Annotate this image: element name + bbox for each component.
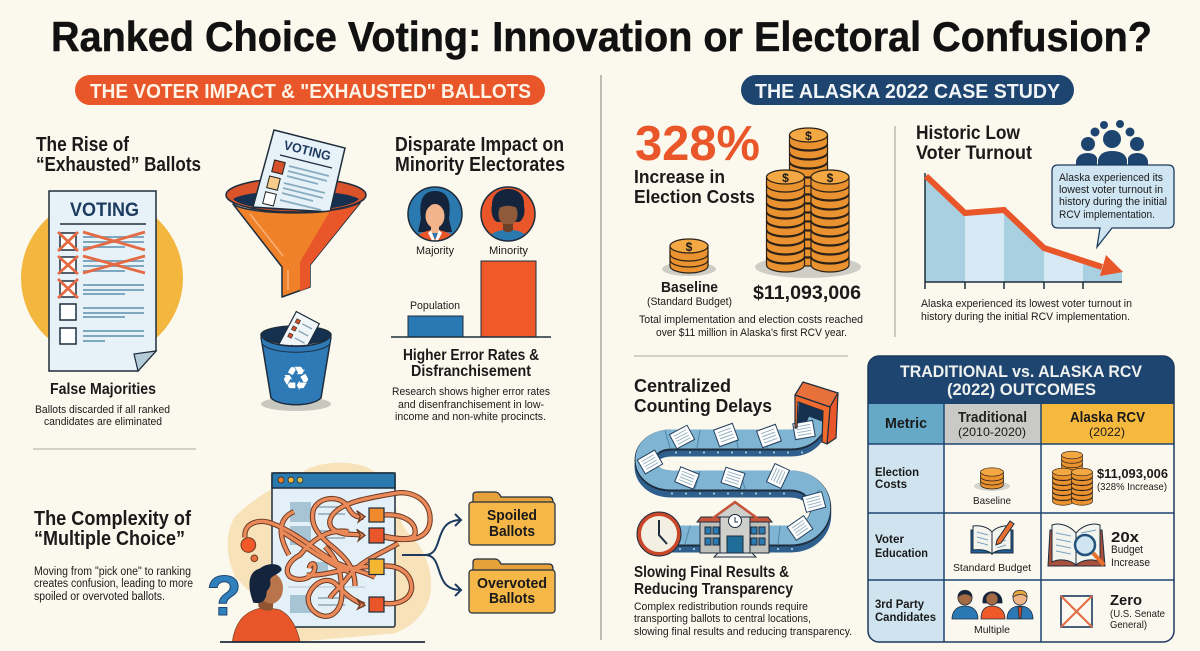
row: third party candidates: 3rd Party — [875, 597, 924, 611]
heading: centralized counting delays — [634, 376, 772, 416]
callout: lowest turnout: RCV implementation. — [1059, 209, 1155, 221]
comparison table — [868, 356, 1174, 642]
arrow: leads to spoiled and overvoted — [402, 514, 461, 596]
row: voter education: Standard Budget — [953, 562, 1031, 574]
icon: baseline coin stack: $ — [686, 240, 693, 254]
text: slowing final results — [634, 564, 852, 638]
icon: crossed-out ballot — [21, 191, 183, 371]
heading: increase in election costs: Increase in — [634, 167, 725, 187]
icon: crossed box — [1061, 596, 1092, 627]
label: baseline: (Standard Budget) — [647, 296, 732, 308]
text: false majorities: Ballots discarded if all ranked — [35, 404, 170, 416]
heading: disparate impact: Minority Electorates — [395, 154, 565, 176]
heading: centralized counting delays: Counting Delays — [634, 396, 772, 416]
column headers: (2022) — [1089, 425, 1125, 439]
icon: candidates — [952, 590, 1033, 619]
text: cost description: Total implementation and election costs reached — [639, 314, 863, 326]
icon: recycling bin: ♻ — [281, 359, 311, 398]
line chart: turnout decline — [925, 173, 1123, 289]
rank boxes — [369, 508, 384, 612]
row: election costs — [875, 451, 1168, 507]
folder: overvoted ballots: Overvoted — [477, 575, 547, 592]
label: minority: Minority — [489, 245, 528, 257]
row: voter education: Education — [875, 546, 928, 560]
text: false majorities — [35, 381, 170, 428]
text: higher error rates: income and non-white procincts. — [395, 411, 546, 423]
text: higher error rates: Disfranchisement — [411, 363, 531, 380]
column headers: (2010-2020) — [958, 425, 1026, 439]
icon: tall coin stacks: $ — [805, 129, 812, 143]
text: complexity of multiple choice: creates confusion, leading to more — [34, 578, 193, 590]
text: slowing final results: transporting ballots to central locations, — [634, 613, 811, 625]
panel: centralized counting — [634, 376, 852, 638]
label: majority: Majority — [416, 245, 454, 257]
text: complexity of multiple choice: spoiled or overvoted ballots. — [34, 591, 165, 603]
ballots on belt — [637, 420, 826, 540]
text: slowing final results: Complex redistribution rounds require — [634, 601, 808, 613]
table title: TRADITIONAL vs. ALASKA RCV — [900, 362, 1143, 381]
column headers — [885, 409, 1145, 439]
row: voter education: 20x — [1111, 529, 1140, 546]
text: cost description — [639, 314, 863, 339]
text: false majorities: candidates are eliminated — [44, 416, 162, 428]
icon: small coins — [974, 468, 1010, 491]
row: third party candidates: Multiple — [974, 624, 1010, 636]
text: complexity of multiple choice: Moving from "pick one" to ranking — [34, 566, 191, 578]
icon: book and magnifier — [1048, 524, 1105, 566]
row: voter education: Voter — [875, 532, 904, 546]
row: third party candidates: Zero — [1110, 592, 1142, 609]
row: voter education — [875, 521, 1150, 574]
bar chart: population vs minority errors — [391, 261, 551, 337]
folder: spoiled ballots — [469, 492, 555, 545]
text: higher error rates — [392, 347, 550, 423]
stat: 328 percent: 328% — [635, 117, 760, 171]
row: election costs: Baseline — [973, 495, 1011, 507]
row: election costs: Costs — [875, 477, 907, 491]
callout: lowest turnout — [1052, 165, 1174, 247]
heading: centralized counting delays: Centralized — [634, 376, 731, 396]
gate — [795, 382, 838, 444]
icon: recycling bin — [261, 312, 331, 411]
heading: rise of exhausted ballots: The Rise of — [36, 134, 129, 156]
row: third party candidates — [875, 590, 1165, 636]
row: voter education: Increase — [1111, 557, 1150, 569]
text: slowing final results: Reducing Transparency — [634, 581, 793, 598]
label: baseline — [647, 279, 732, 308]
row: third party candidates: General) — [1110, 619, 1147, 631]
icon: ballot in funnel — [226, 130, 366, 297]
text: slowing final results: Slowing Final Results & — [634, 564, 789, 581]
panel: exhausted ballots — [21, 134, 201, 428]
icon: tall coin stacks: $ — [782, 171, 789, 185]
heading: rise of exhausted ballots: “Exhausted” Ballots — [36, 154, 201, 176]
icon: baseline coin stack — [662, 239, 716, 276]
icon: tall coins — [1053, 451, 1092, 505]
text: slowing final results: slowing final results and reducing transparency. — [634, 626, 852, 638]
row: election costs: (328% Increase) — [1097, 481, 1167, 493]
section heading: alaska case study: THE ALASKA 2022 CASE STUDY — [755, 80, 1060, 103]
callout: lowest turnout: lowest voter turnout in — [1059, 184, 1163, 196]
icon: confused person — [207, 564, 300, 642]
bar chart: population vs minority errors: Population — [410, 300, 460, 312]
column headers: Metric — [885, 415, 927, 432]
icon: tall coin stacks: $ — [827, 171, 834, 185]
column headers: Alaska RCV — [1070, 409, 1145, 426]
icon: crowd — [1076, 120, 1148, 166]
heading: increase in election costs: Election Costs — [634, 187, 755, 207]
row: election costs: $11,093,006 — [1097, 467, 1168, 481]
row: third party candidates: (U.S. Senate — [1110, 608, 1165, 620]
heading: disparate impact: Disparate Impact on — [395, 134, 564, 156]
text: complexity of multiple choice: “Multiple Choice” — [34, 528, 185, 550]
table title — [900, 362, 1143, 399]
tangled arrows — [241, 493, 430, 616]
text: higher error rates: Higher Error Rates & — [403, 347, 539, 364]
icon: clock — [637, 512, 681, 556]
text: higher error rates: and disenfranchisement in low- — [398, 399, 544, 411]
text: complexity of multiple choice — [34, 508, 193, 603]
icon: tall coin stacks — [755, 128, 861, 278]
icon: conveyor belt — [637, 382, 838, 549]
section heading: voter impact: THE VOTER IMPACT & "EXHAUSTED" BALLOTS — [90, 80, 531, 103]
text: complexity of multiple choice: The Complexity of — [34, 508, 191, 530]
folder: spoiled ballots: Spoiled — [487, 507, 537, 524]
heading: historic low turnout — [916, 123, 1033, 164]
icon: book and pencil — [971, 521, 1014, 554]
icon: minority voter — [481, 187, 535, 244]
row: election costs: Election — [875, 465, 919, 479]
stat: total cost: $11,093,006 — [753, 283, 861, 304]
icon: majority voter — [408, 187, 462, 246]
icon: counting building — [697, 502, 772, 557]
row: voter education: Budget — [1111, 544, 1143, 556]
folder: overvoted ballots — [469, 559, 555, 613]
heading: historic low turnout: Historic Low — [916, 123, 1020, 144]
table title: (2022) OUTCOMES — [947, 380, 1096, 399]
panel: disparate impact — [391, 134, 565, 423]
text: higher error rates: Research shows higher error rates — [392, 386, 550, 398]
text: chart caption: history during the initial RCV implementation. — [921, 311, 1130, 323]
panel: election costs — [634, 117, 863, 339]
heading: increase in election costs — [634, 167, 755, 207]
text: cost description: over $11 million in Alaska's first RCV year. — [656, 327, 847, 339]
column headers: Traditional — [958, 409, 1027, 426]
text: false majorities: False Majorities — [50, 381, 156, 398]
icon: crossed-out ballot: VOTING — [70, 200, 139, 221]
label: baseline: Baseline — [661, 279, 718, 296]
folder: overvoted ballots: Ballots — [489, 590, 535, 607]
panel: voter turnout — [916, 120, 1174, 323]
ballot window — [272, 473, 395, 627]
heading: historic low turnout: Voter Turnout — [916, 143, 1033, 164]
illustration: confusing ballot tangle — [207, 463, 431, 642]
text: chart caption: Alaska experienced its lowest voter turnout in — [921, 298, 1132, 310]
callout: lowest turnout: history during the initial — [1059, 196, 1167, 208]
callout: lowest turnout: Alaska experienced its — [1059, 172, 1163, 184]
title: Ranked Choice Voting: Innovation or Electoral Confusion? — [51, 13, 1152, 60]
folder: spoiled ballots: Ballots — [489, 523, 535, 540]
row: third party candidates: Candidates — [875, 610, 936, 624]
text: chart caption — [921, 298, 1132, 323]
icon: ballot in funnel: VOTING — [282, 137, 332, 164]
icon: confused person: ? — [207, 564, 241, 628]
heading: disparate impact — [395, 134, 565, 176]
heading: rise of exhausted ballots — [36, 134, 201, 176]
